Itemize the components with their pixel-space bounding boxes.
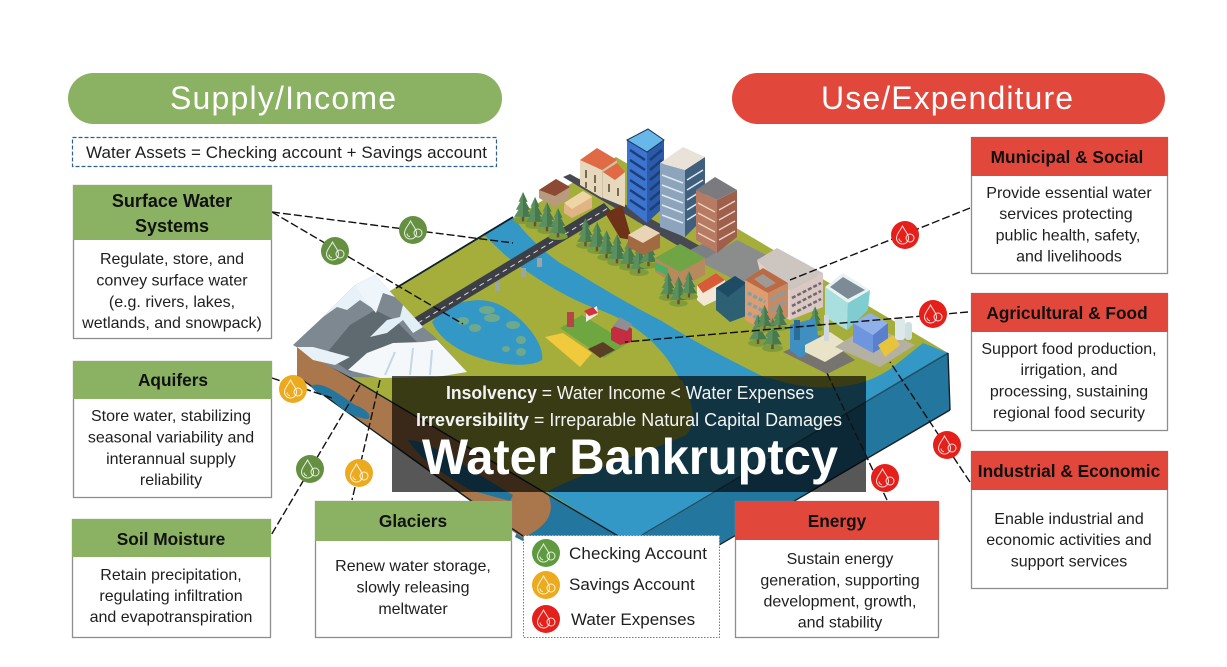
- panel: soil moisture: regulating infiltration: [99, 588, 243, 605]
- legend: [524, 536, 720, 638]
- irreversibility equation: Irreversibility = Irreparable Natural Capital Damages: [416, 409, 842, 430]
- teal building: [825, 273, 870, 330]
- grey tower: [660, 147, 705, 237]
- panel: agricultural and food: irrigation, and: [1021, 362, 1117, 379]
- panel: glaciers: [315, 501, 512, 638]
- icon: expense agriculture: [919, 300, 947, 328]
- panel: aquifers: seasonal variability and: [88, 430, 254, 446]
- legend: water expenses: [532, 605, 695, 633]
- panel: surface water systems: convey surface water: [96, 272, 248, 290]
- panel: industrial and economic: economic activities and: [986, 532, 1152, 549]
- panel: surface water systems: Regulate, store, and: [100, 251, 244, 268]
- panel: agricultural and food: Support food production,: [981, 341, 1157, 358]
- panel: energy: Energy: [808, 511, 867, 531]
- slab left water face: [515, 492, 640, 600]
- panel: agricultural and food: processing, sustaining: [990, 384, 1148, 400]
- panel: municipal and social: Municipal & Social: [991, 147, 1143, 167]
- trees cluster middle: [576, 218, 658, 276]
- beige houses: [580, 148, 625, 207]
- panel: surface water systems: (e.g. rivers, lakes,: [109, 294, 235, 311]
- panel: industrial and economic: Enable industrial and: [994, 511, 1144, 528]
- trees cluster right: [659, 271, 698, 307]
- panel: glaciers: Glaciers: [379, 511, 447, 531]
- orange building: [745, 268, 788, 333]
- panel: surface water systems: Surface Water: [112, 191, 232, 211]
- central banner: [392, 376, 866, 492]
- panel: municipal and social: services protecting: [999, 206, 1133, 223]
- pink building: [757, 248, 823, 320]
- icon: expense industrial: [933, 431, 961, 459]
- trees cluster lower: [748, 304, 823, 352]
- panel: soil moisture: Retain precipitation,: [100, 567, 242, 584]
- city street: [563, 174, 700, 253]
- isometric landscape slab: [293, 129, 950, 600]
- panel: surface water systems: Systems: [135, 216, 209, 236]
- heading: supply income: Supply/Income: [170, 80, 396, 116]
- road and bridge: [414, 203, 612, 327]
- brick tower: [696, 177, 737, 253]
- heading: use expenditure: [732, 73, 1165, 124]
- panel: soil moisture: Soil Moisture: [117, 529, 226, 549]
- icon: expense energy: [871, 464, 899, 492]
- insolvency equation: Insolvency = Water Income < Water Expenses: [446, 382, 814, 403]
- panel: surface water systems: [73, 185, 272, 338]
- legend: checking account: [532, 539, 707, 567]
- panel: industrial and economic: Industrial & Economic: [978, 461, 1161, 481]
- blue tower: [627, 129, 664, 223]
- main title: Water Bankruptcy: [422, 429, 838, 485]
- water assets note: Water Assets = Checking account + Savings account: [86, 143, 487, 162]
- slab top surface: [297, 157, 948, 543]
- panel: glaciers: meltwater: [378, 601, 448, 618]
- trees cluster upper: [513, 192, 568, 240]
- panel: energy: and stability: [798, 614, 882, 632]
- panel: municipal and social: [971, 137, 1168, 274]
- panel: agricultural and food: [971, 293, 1168, 430]
- edges of slab: [297, 217, 950, 590]
- panel: aquifers: [73, 361, 272, 498]
- panel: municipal and social: Provide essential water: [986, 185, 1152, 202]
- connectors supply: [270, 212, 513, 537]
- panel: surface water systems: wetlands, and snowpack): [81, 315, 262, 332]
- panel: soil moisture: [72, 519, 271, 638]
- panel: energy: development, growth,: [764, 594, 916, 610]
- river: [483, 217, 770, 380]
- small houses: [539, 179, 632, 240]
- connectors expenditure: [625, 208, 970, 500]
- panel: energy: Sustain energy: [787, 551, 893, 568]
- icon: savings glacier: [345, 459, 373, 487]
- panel: energy: generation, supporting: [760, 572, 920, 590]
- water assets note: [72, 138, 496, 166]
- panel: agricultural and food: Agricultural & Food: [986, 303, 1148, 323]
- panel: industrial and economic: [971, 451, 1168, 588]
- water front section: [547, 343, 948, 543]
- panel: glaciers: Renew water storage,: [335, 558, 491, 575]
- slab right water face: [630, 353, 950, 590]
- panel: energy: [735, 501, 939, 638]
- heading: supply income: [68, 73, 502, 124]
- icon: expense municipal: [891, 221, 919, 249]
- icon: checking surface 2: [321, 237, 349, 265]
- panel: municipal and social: public health, safety,: [996, 228, 1140, 244]
- power plant: [783, 315, 855, 374]
- aquifer in soil: [311, 385, 369, 419]
- heading: use expenditure: Use/Expenditure: [821, 80, 1073, 116]
- slab left soil face: [297, 346, 551, 538]
- lake wetlands: [457, 306, 526, 356]
- panel: aquifers: reliability: [140, 472, 202, 489]
- farm: [545, 306, 632, 367]
- panel: municipal and social: and livelihoods: [1016, 248, 1122, 266]
- legend: savings account: [532, 571, 695, 599]
- panel: aquifers: Aquifers: [138, 370, 208, 390]
- panel: industrial and economic: support services: [1011, 554, 1127, 570]
- shops along the street: [628, 225, 746, 322]
- panel: glaciers: slowly releasing: [357, 580, 469, 596]
- legend: water expenses: Water Expenses: [571, 610, 695, 629]
- snowy mountain: [293, 275, 467, 378]
- lake: [432, 300, 542, 365]
- panel: aquifers: interannual supply: [106, 451, 236, 468]
- panel: soil moisture: and evapotranspiration: [90, 609, 252, 626]
- panel: agricultural and food: regional food security: [993, 405, 1145, 422]
- panel: aquifers: Store water, stabilizing: [91, 408, 251, 425]
- legend: checking account: Checking Account: [569, 544, 707, 563]
- legend: savings account: Savings Account: [569, 575, 695, 594]
- deep aquifer under banner: [408, 440, 513, 501]
- icon: checking surface 1: [399, 216, 427, 244]
- icon: checking soil: [296, 455, 324, 483]
- icon: savings aquifer: [279, 375, 307, 403]
- factory: [835, 313, 915, 367]
